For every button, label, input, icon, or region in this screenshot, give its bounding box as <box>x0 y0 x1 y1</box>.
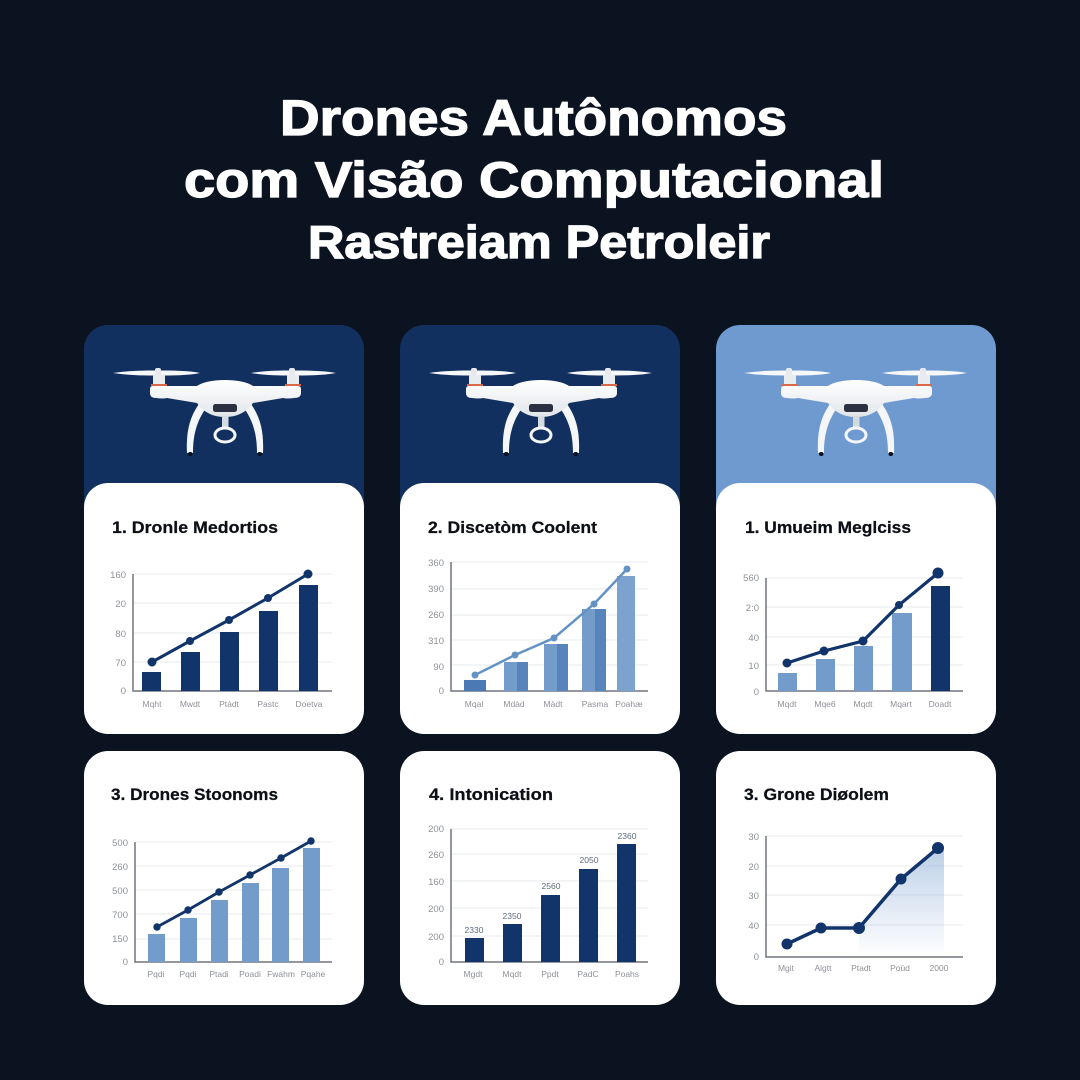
chart: card 6 area line: Mgit <box>778 963 795 973</box>
chart: card 5 bars: 200 <box>428 824 444 835</box>
chart: card 4 bars and line: Ptadi <box>209 969 229 979</box>
chart: card 5 bars: 200 <box>428 904 444 915</box>
chart: card 6 area line: Ptadt <box>851 963 872 973</box>
chart: card 3 bars and line: Mqe6 <box>814 699 836 709</box>
chart: card 2 bars and line: 360 <box>428 558 444 569</box>
chart: card 4 bars and line: Poadi <box>239 969 261 979</box>
chart: card 6 area line: 30 <box>748 891 759 902</box>
chart: card 2 bars and line: Mqal <box>465 699 483 709</box>
chart: card 2 bars and line: Mdàd <box>503 699 525 709</box>
title: Rastreiam Petroleir <box>308 216 770 268</box>
chart: card 1 bars and line: 70 <box>115 658 126 669</box>
chart: card 1 bars and line: Ptádt <box>219 699 240 709</box>
heading: card 5: 4. Intonication <box>429 785 553 804</box>
panel: card 4 <box>84 751 364 1005</box>
chart: card 1 bars and line: Mqht <box>143 699 162 709</box>
chart: card 1 bars and line: 20 <box>115 599 126 610</box>
panel: card 2 <box>400 483 680 734</box>
chart: card 3 bars and line: Doadt <box>929 699 952 709</box>
chart: card 4 bars and line: 700 <box>112 910 128 921</box>
chart: card 5 bars: 2350 <box>503 911 522 921</box>
chart: card 1 bars and line: 80 <box>115 629 126 640</box>
heading: card 2: 2. Discetòm Coolent <box>428 518 597 537</box>
chart: card 2 bars and line: Pasma <box>582 699 608 709</box>
chart: card 5 bars: Mqdt <box>503 969 522 979</box>
chart: card 4 bars and line: 260 <box>112 862 128 873</box>
panel: card 6 <box>716 751 996 1005</box>
icon: drone 3 <box>744 368 967 456</box>
chart: card 4 bars and line: 0 <box>123 957 128 968</box>
panel: drone header 3 <box>716 325 996 525</box>
chart: card 5 bars: Mgdt <box>464 969 483 979</box>
chart: card 6 area line: 20 <box>748 862 759 873</box>
chart: card 4 bars and line <box>112 837 332 979</box>
chart: card 5 bars: 2330 <box>465 925 484 935</box>
chart: card 3 bars and line: Mqdt <box>778 699 797 709</box>
chart: card 5 bars: PadC <box>577 969 599 979</box>
panel: drone header 2 <box>400 325 680 525</box>
icon: drone 1 <box>113 368 336 456</box>
heading: card 3: 1. Umueim Meglciss <box>745 518 911 537</box>
panel: drone header 1 <box>84 325 364 525</box>
chart: card 6 area line: 2000 <box>930 963 949 973</box>
chart: card 1 bars and line: Doetva <box>296 699 323 709</box>
chart: card 5 bars: Poahs <box>615 969 639 979</box>
chart: card 5 bars <box>428 824 648 979</box>
chart: card 3 bars and line: Mqart <box>890 699 912 709</box>
heading: card 1: 1. Dronle Medortios <box>112 518 278 537</box>
chart: card 4 bars and line: 500 <box>112 838 128 849</box>
chart: card 4 bars and line: Pqdi <box>179 969 197 979</box>
chart: card 4 bars and line: 150 <box>112 934 128 945</box>
panel: card 1 <box>84 483 364 734</box>
chart: card 5 bars: 2560 <box>542 881 561 891</box>
chart: card 2 bars and line: 390 <box>428 584 444 595</box>
chart: card 6 area line: Algtt <box>814 963 832 973</box>
heading: card 4: 3. Drones Stoonoms <box>111 785 278 804</box>
chart: card 2 bars and line: 0 <box>439 686 444 697</box>
chart: card 3 bars and line: 0 <box>754 687 759 698</box>
heading: card 6: 3. Grone Diøolem <box>744 785 889 804</box>
chart: card 2 bars and line <box>428 558 648 709</box>
chart: card 3 bars and line: 10 <box>748 661 759 672</box>
panel: card 3 <box>716 483 996 734</box>
chart: card 2 bars and line: 90 <box>433 662 444 673</box>
chart: card 2 bars and line: 260 <box>428 610 444 621</box>
title: Drones Autônomos <box>280 90 787 146</box>
title: com Visão Computacional <box>184 152 884 208</box>
chart: card 5 bars: 160 <box>428 877 444 888</box>
chart: card 4 bars and line: 500 <box>112 886 128 897</box>
chart: card 5 bars: 2050 <box>580 855 599 865</box>
chart: card 5 bars: Ppdt <box>541 969 559 979</box>
chart: card 1 bars and line: 0 <box>121 686 126 697</box>
chart: card 5 bars: 0 <box>439 957 444 968</box>
chart: card 3 bars and line: 560 <box>743 573 759 584</box>
chart: card 6 area line: 0 <box>754 952 759 963</box>
chart: card 5 bars: 2360 <box>618 831 637 841</box>
chart: card 3 bars and line <box>743 568 963 709</box>
icon: drone 2 <box>429 368 652 456</box>
chart: card 6 area line: 40 <box>748 921 759 932</box>
chart: card 3 bars and line: 2:0 <box>746 603 759 614</box>
chart: card 3 bars and line: 40 <box>748 633 759 644</box>
panel: card 5 <box>400 751 680 1005</box>
chart: card 1 bars and line <box>110 570 332 709</box>
chart: card 1 bars and line: Pastc <box>257 699 279 709</box>
chart: card 1 bars and line: Mwdt <box>180 699 201 709</box>
chart: card 1 bars and line: 160 <box>110 570 126 581</box>
chart: card 3 bars and line: Mqdt <box>854 699 873 709</box>
chart: card 5 bars: 260 <box>428 850 444 861</box>
chart: card 5 bars: 200 <box>428 932 444 943</box>
chart: card 4 bars and line: Pqdi <box>147 969 165 979</box>
chart: card 2 bars and line: 310 <box>428 636 444 647</box>
chart: card 2 bars and line: Màdt <box>544 699 563 709</box>
chart: card 4 bars and line: Fwahm <box>267 969 295 979</box>
chart: card 6 area line <box>748 832 963 973</box>
title <box>184 90 884 268</box>
chart: card 6 area line: Poüd <box>890 963 910 973</box>
chart: card 2 bars and line: Poahæ <box>615 699 643 709</box>
chart: card 6 area line: 30 <box>748 832 759 843</box>
chart: card 4 bars and line: Pqahe <box>301 969 326 979</box>
